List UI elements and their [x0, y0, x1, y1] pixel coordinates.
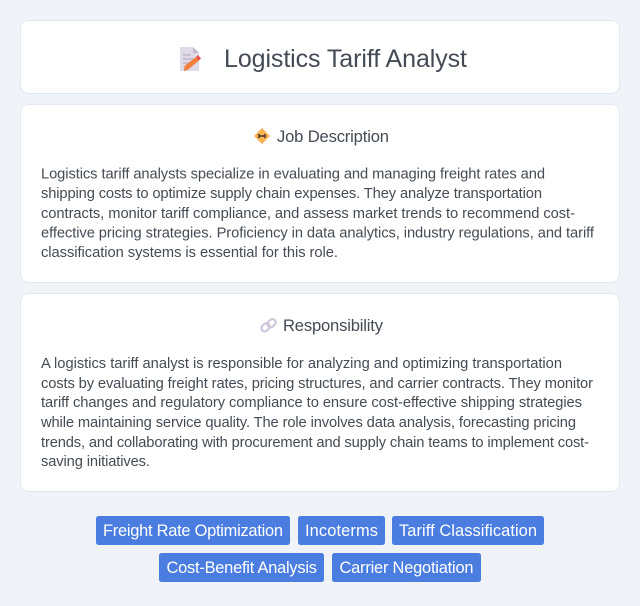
tag: Freight Rate Optimization [96, 516, 290, 545]
tag: Tariff Classification [392, 516, 544, 545]
icon: diamond sign [254, 128, 270, 144]
tag: Incoterms [298, 516, 385, 545]
icon: chain link [260, 318, 277, 333]
panel: job description [20, 104, 620, 282]
panel: responsibility [20, 294, 620, 492]
text block: job description: classification systems is essential for this role. [41, 245, 338, 261]
tag: Tariff Classification: Tariff Classification [399, 522, 537, 540]
heading: responsibility: Responsibility [283, 316, 384, 335]
text block: job description: contracts, monitor tariff compliance, and assess market trends to recommend cost- [41, 206, 575, 222]
text block: responsibility: trends, and collaborating with procurement and supply chain teams to implement cost- [41, 435, 589, 451]
text block: job description [41, 166, 595, 261]
text block: job description: shipping costs to optimize supply chain expenses. They analyze transportation [41, 186, 542, 202]
icon: document with pencil [180, 47, 201, 71]
panel: title header [20, 20, 620, 94]
text block: responsibility: costs by evaluating freight rates, pricing structures, and carrier contracts. They monitor [41, 376, 593, 392]
title: Logistics Tariff Analyst [224, 45, 467, 73]
text block: responsibility: while maintaining service quality. The role involves data analysis, forecasting pricing [40, 415, 576, 431]
tag: Carrier Negotiation: Carrier Negotiation [340, 559, 474, 577]
text block: job description: effective pricing strategies. Proficiency in data analytics, industry regulations, and tariff [41, 226, 595, 242]
text block: responsibility: tariff changes and regulatory compliance to ensure cost-effective shipping strategies [41, 395, 582, 411]
tag: Cost-Benefit Analysis [159, 553, 324, 582]
tag: Cost-Benefit Analysis: Cost-Benefit Analysis [166, 559, 317, 577]
text block: responsibility: A logistics tariff analyst is responsible for analyzing and optimizing transportation [41, 356, 562, 372]
text block: job description: Logistics tariff analysts specialize in evaluating and managing freight rates and [41, 166, 545, 182]
tag: Incoterms: Incoterms [305, 522, 378, 540]
tag: Freight Rate Optimization: Freight Rate Optimization [103, 522, 283, 540]
text block: responsibility: saving initiatives. [41, 454, 150, 470]
text block: responsibility [40, 356, 593, 470]
tag: Carrier Negotiation [332, 553, 481, 582]
heading: job description: Job Description [277, 127, 389, 146]
